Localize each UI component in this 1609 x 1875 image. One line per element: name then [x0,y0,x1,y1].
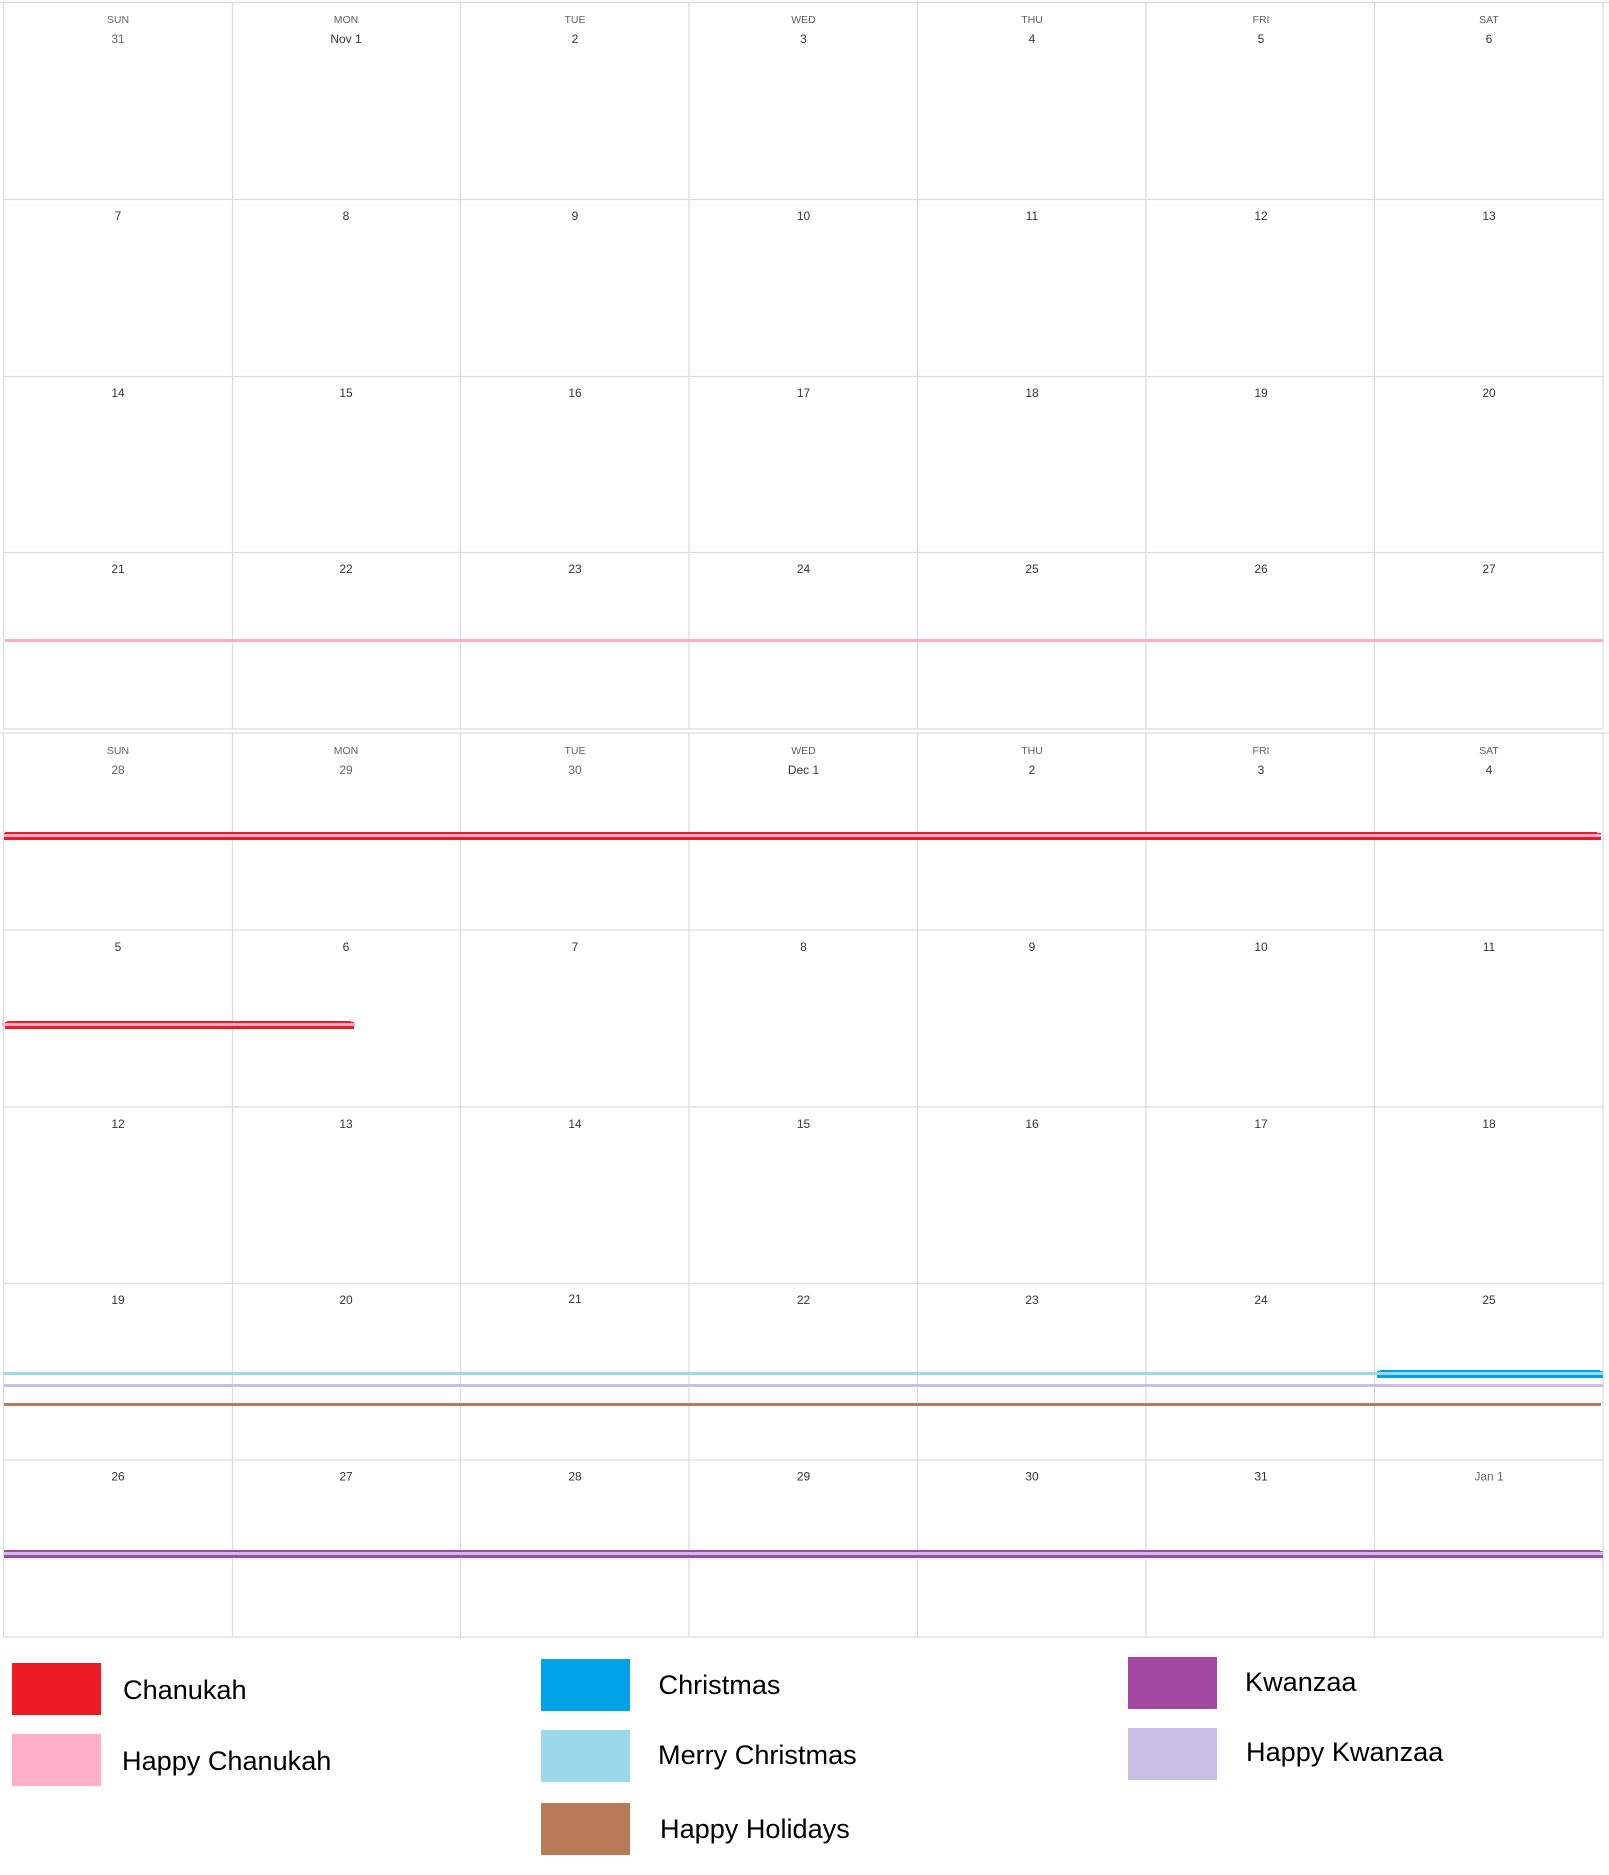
week 2 dates: 13 [1482,209,1496,223]
week 1 dates [111,32,1493,46]
week 4 dates: 24 [1254,1293,1268,1307]
panel: December calendar [0,733,1609,1637]
weekday headers: TUE [564,745,586,757]
week 4 dates: 24 [797,562,810,576]
legend item: Christmas [541,1659,780,1711]
legend [12,1657,1444,1855]
legend item: Chanukah: Chanukah [123,1674,247,1705]
week 3 dates: 14 [568,1117,582,1131]
week 4 dates [111,562,1496,576]
week 2 dates: 12 [1254,209,1268,223]
week 2 dates: 11 [1026,209,1039,223]
weekday headers: THU [1021,745,1043,757]
week 2 dates: 11 [1483,940,1496,954]
week 5 dates: 30 [1025,1470,1039,1484]
week 2 dates [115,209,1496,223]
week 5 dates: 28 [568,1470,582,1484]
week 1 dates: 6 [1486,32,1493,46]
week 2 dates: 10 [797,209,810,223]
legend item: Christmas: Christmas [658,1669,780,1700]
panel: November calendar [0,2,1609,729]
week 5 dates: 26 [111,1470,125,1484]
week 5 dates: 29 [797,1470,810,1484]
week 1 dates: 31 [111,32,125,46]
week 1 dates: 5 [1258,32,1265,46]
bar: Happy Chanukah, Nov 21-27 [5,639,1603,642]
legend item: Happy Holidays: Happy Holidays [660,1813,850,1844]
week 2 dates: 7 [572,940,579,954]
weekday headers: SAT [1479,14,1499,26]
week 3 dates: 15 [339,386,353,400]
week 5 dates: Jan 1 [1474,1470,1504,1484]
week 4 dates: 23 [568,562,582,576]
weekday headers: SAT [1479,745,1499,757]
week 2 dates: 8 [343,209,350,223]
week 2 dates: 6 [343,940,350,954]
legend item: Kwanzaa [1128,1657,1357,1709]
legend item: Happy Holidays [541,1803,850,1855]
weekday headers: FRI [1253,14,1269,26]
legend item: Happy Kwanzaa: Happy Kwanzaa [1246,1736,1444,1767]
week 1 dates: 3 [800,32,807,46]
week 3 dates: 16 [1025,1117,1039,1131]
week 3 dates [111,1117,1496,1131]
week 5 dates [111,1470,1504,1484]
bar: Chanukah, Nov 28-Dec 4 [4,832,1601,840]
week 1 dates: Dec 1 [788,763,819,777]
weekday headers: WED [791,14,816,26]
bar: Merry Christmas, Dec 19-25 [4,1372,1603,1375]
bar: Christmas, Dec 25 [1377,1370,1603,1378]
weekday headers: MON [334,745,358,757]
week 4 dates: 21 [568,1292,582,1306]
week 1 dates: 3 [1258,763,1265,777]
week 2 dates: 5 [115,940,122,954]
week 4 dates: 25 [1025,562,1039,576]
week 2 dates: 9 [1029,940,1036,954]
week 3 dates: 13 [339,1117,353,1131]
week 3 dates: 20 [1482,386,1496,400]
weekday headers: TUE [564,14,586,26]
week 1 dates: 2 [1029,763,1036,777]
week 3 dates: 14 [111,386,125,400]
weekday headers: SUN [107,14,129,26]
weekday headers: SUN [107,745,129,757]
legend item: Happy Chanukah: Happy Chanukah [122,1745,331,1776]
week 2 dates: 7 [115,209,122,223]
week 4 dates: 26 [1254,562,1268,576]
week 1 dates: Nov 1 [330,32,362,46]
legend item: Merry Christmas [541,1730,857,1782]
bar: Happy Kwanzaa, Dec 19-25 [4,1384,1603,1387]
week 4 dates [111,1292,1496,1307]
legend item: Chanukah [12,1663,247,1715]
week 1 dates: 4 [1029,32,1036,46]
week 3 dates: 15 [797,1117,810,1131]
weekday headers [107,14,1499,26]
week 4 dates: 25 [1482,1293,1496,1307]
week 5 dates: 27 [339,1470,353,1484]
week 4 dates: 22 [339,562,353,576]
week 2 dates: 9 [572,209,579,223]
week 3 dates: 12 [111,1117,125,1131]
legend item: Happy Kwanzaa [1128,1728,1444,1780]
week 4 dates: 21 [111,562,125,576]
week 1 dates: 30 [568,763,582,777]
weekday headers: THU [1021,14,1043,26]
week 3 dates: 16 [568,386,582,400]
week 4 dates: 27 [1482,562,1496,576]
week 4 dates: 23 [1025,1293,1039,1307]
week 3 dates: 18 [1482,1117,1496,1131]
week 3 dates: 18 [1025,386,1039,400]
weekday headers [107,745,1499,757]
week 2 dates: 10 [1254,940,1268,954]
week 1 dates: 29 [339,763,353,777]
week 5 dates: 31 [1254,1470,1268,1484]
week 2 dates: 8 [800,940,807,954]
week 3 dates [111,386,1496,400]
weekday headers: MON [334,14,358,26]
week 4 dates: 19 [111,1293,125,1307]
bar: Kwanzaa, Dec 26-Jan 1 [4,1550,1603,1558]
bar: Happy Holidays, Dec 19-25 [4,1403,1601,1406]
week 3 dates: 17 [797,386,810,400]
legend item: Happy Chanukah [12,1734,331,1786]
bar: Chanukah, Dec 5-6 [2,1021,355,1029]
week 3 dates: 19 [1254,386,1268,400]
week 3 dates: 17 [1254,1117,1268,1131]
week 1 dates: 4 [1486,763,1493,777]
week 1 dates [111,763,1493,777]
legend item: Kwanzaa: Kwanzaa [1245,1666,1357,1697]
week 4 dates: 22 [797,1293,810,1307]
week 2 dates [115,940,1496,954]
week 1 dates: 2 [572,32,579,46]
week 4 dates: 20 [339,1293,353,1307]
weekday headers: FRI [1253,745,1269,757]
weekday headers: WED [791,745,816,757]
week 1 dates: 28 [111,763,125,777]
legend item: Merry Christmas: Merry Christmas [658,1739,857,1770]
